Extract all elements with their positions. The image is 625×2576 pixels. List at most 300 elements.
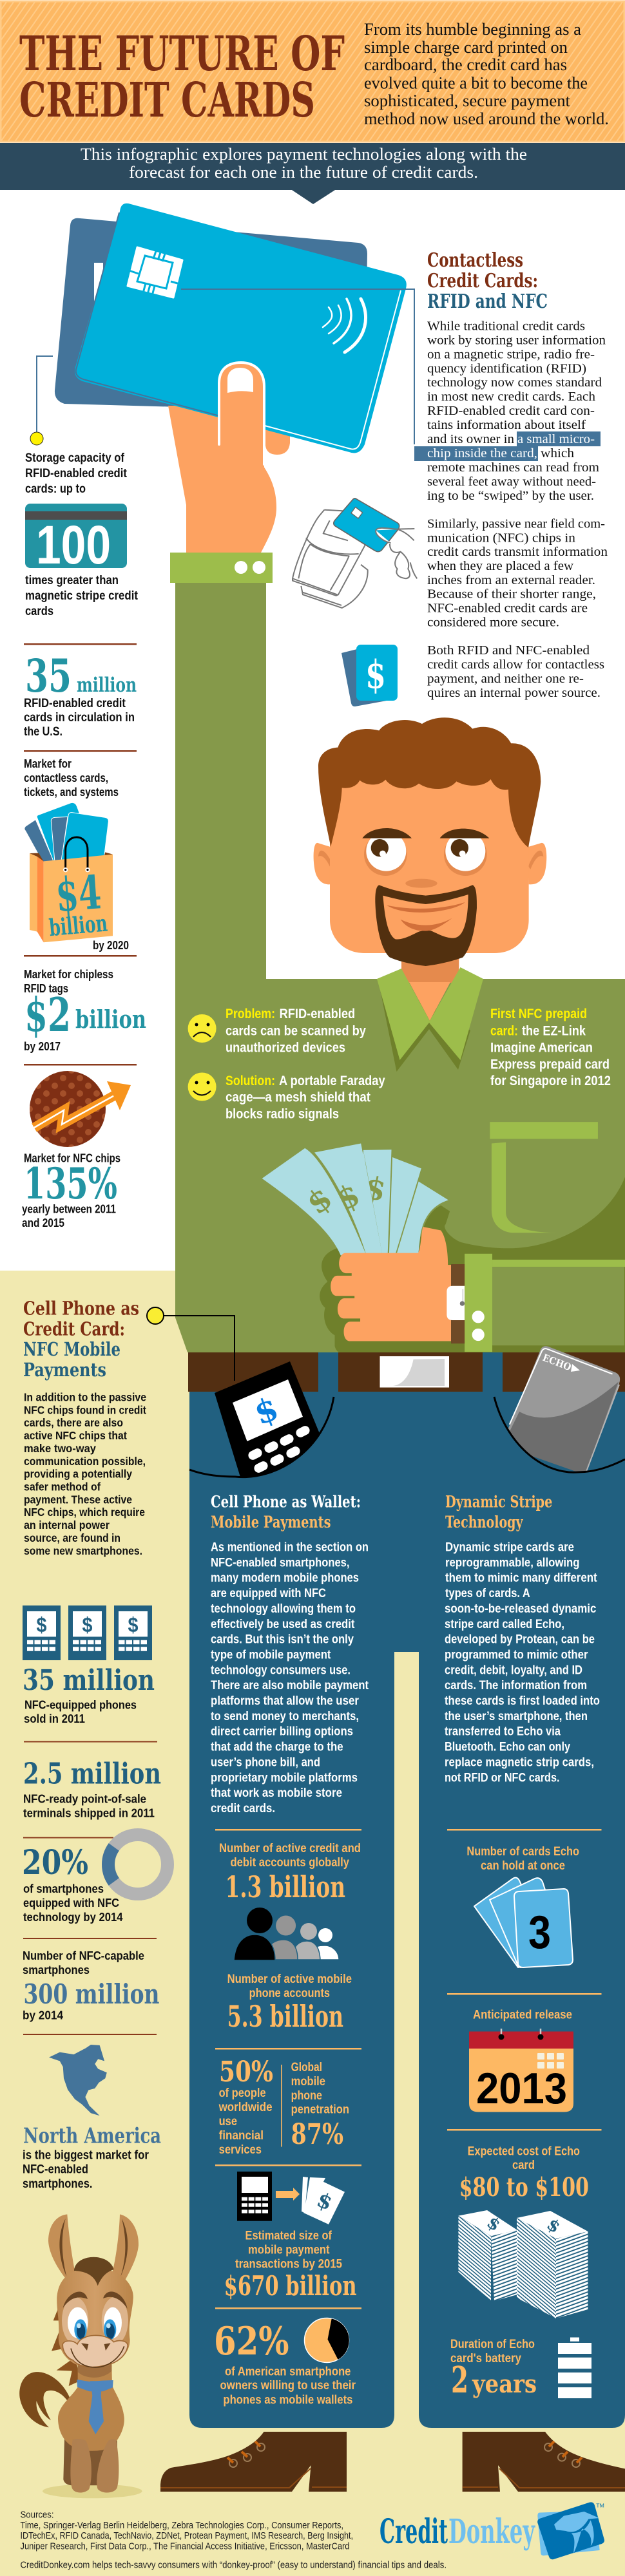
logo card icon <box>537 2502 604 2559</box>
ears <box>314 843 546 884</box>
icon: shopping bag of cards: $4 <box>54 865 103 922</box>
icon: phone to money <box>237 2172 345 2224</box>
body text: make two-way <box>24 1442 96 1455</box>
illustration: fist holding money <box>262 1143 625 1352</box>
body text: platforms that allow the user <box>211 1694 360 1708</box>
body text: credit cards. <box>211 1802 275 1815</box>
stat: 62% wallets: owners willing to use their <box>220 2379 356 2392</box>
body text: types of cards. A <box>445 1587 530 1600</box>
icon: dollar card: $ <box>365 652 386 697</box>
intro text <box>364 20 609 128</box>
body paragraphs: tains information about itself <box>427 418 586 432</box>
stat: mobile accounts: phone accounts <box>249 1987 330 2000</box>
stat: expected cost: card <box>512 2159 535 2172</box>
stat: transactions: $670 billion <box>224 2270 357 2302</box>
body text: technology allowing them to <box>211 1602 356 1616</box>
heading <box>23 1297 139 1381</box>
subtitle band with pointer <box>0 143 625 204</box>
panel: contactless text column <box>414 249 608 700</box>
body paragraphs <box>427 319 608 700</box>
stat: battery life <box>450 2338 591 2401</box>
stat: 50% financial services: use <box>219 2115 237 2128</box>
money bills: $ <box>361 1170 389 1209</box>
back card <box>55 218 367 412</box>
title: THE FUTURE OF <box>19 26 345 82</box>
callout: first NFC prepaid card: for Singapore in 2012 <box>490 1074 611 1088</box>
heading <box>211 1493 361 1531</box>
icon: calendar 2013: 2013 <box>476 2064 567 2113</box>
body text: There are also mobile payment <box>211 1679 369 1692</box>
stat: transactions <box>224 2230 357 2302</box>
mane <box>52 2309 81 2386</box>
eyebrows <box>63 2291 128 2309</box>
stat: 135%: 135% <box>24 1159 117 1209</box>
body paragraphs: chip inside the card, <box>427 446 537 460</box>
stat: 62% wallets: of American smartphone <box>225 2365 351 2378</box>
stat: storage capacity: Storage capacity of <box>25 451 125 465</box>
body text: effectively be used as credit <box>211 1618 355 1631</box>
body text: source, are found in <box>24 1531 120 1544</box>
pocket line <box>189 1397 334 1477</box>
pie chart <box>304 2318 349 2362</box>
stat: 2.5 million terminals: terminals shipped in 2011 <box>23 1806 155 1819</box>
title: CREDIT CARDS <box>19 73 315 128</box>
stat: 20% smartphones donut: technology by 2014 <box>23 1911 122 1924</box>
body text: replace magnetic strip cards, <box>445 1756 594 1769</box>
stat: storage capacity: times greater than <box>25 574 119 587</box>
illustration: donkey mascot <box>19 2214 142 2498</box>
stat: battery life: Duration of Echo <box>450 2338 535 2351</box>
stat: 50% financial services: 50% <box>219 2056 273 2088</box>
icon: mobile phone in pocket <box>189 1361 334 1488</box>
nose <box>405 879 438 888</box>
body text: NFC chips found in credit <box>24 1403 146 1416</box>
stat: North America: is the biggest market for <box>23 2149 149 2163</box>
body text: NFC chips, which require <box>24 1506 145 1519</box>
stat: storage capacity <box>25 451 139 618</box>
stat: $2 billion: billion <box>75 1005 146 1034</box>
stat: 20% smartphones donut: 20% <box>22 1843 88 1882</box>
callout: first NFC prepaid card <box>490 1007 611 1088</box>
body text: not RFID or NFC cards. <box>445 1771 559 1785</box>
donut chart <box>108 1835 168 1894</box>
body paragraphs: RFID-enabled credit card con- <box>427 404 595 418</box>
icon: North America map <box>49 2045 107 2116</box>
body paragraphs: several feet away without need- <box>427 475 596 489</box>
hair <box>318 717 541 848</box>
callout: problem and solution: A portable Faraday <box>279 1074 385 1088</box>
callout: problem and solution: cage—a mesh shield that <box>226 1090 370 1105</box>
body text: direct carrier billing options <box>211 1725 353 1739</box>
body <box>58 2363 124 2451</box>
sources footer: IDTechEx, RFID Canada, TechNavio, ZDNet, Protean Payment, IMS Research, Berg Insight, <box>21 2530 353 2541</box>
body text: cards. The information from <box>445 1679 587 1692</box>
icon: echo card in pocket <box>494 1346 625 1475</box>
stat: 135% <box>22 1071 131 1229</box>
sources footer: CreditDonkey.com helps tech-savvy consumers with “donkey-proof” (easy to understand) financial tips and deals. <box>21 2559 447 2571</box>
eyebrows <box>362 828 489 838</box>
stat: anticipated release: Anticipated release <box>473 2008 572 2022</box>
body paragraphs: which <box>541 446 574 460</box>
body text: them to mimic many different <box>445 1571 597 1585</box>
stat: $2 billion: $2 <box>24 987 71 1042</box>
stat: 135%: and 2015 <box>22 1217 64 1229</box>
stat: 87% penetration: penetration <box>291 2103 349 2117</box>
stat: 87% penetration <box>291 2061 349 2151</box>
body paragraphs: NFC-enabled credit cards are <box>427 601 588 615</box>
eyes <box>68 2307 122 2340</box>
stat: mobile accounts: 5.3 billion <box>227 1999 343 2034</box>
icon: three phones: $ <box>36 1613 47 1636</box>
body paragraphs: Because of their shorter range, <box>427 587 596 601</box>
highlight boxes <box>414 431 601 461</box>
body paragraphs: credit cards allow for contactless <box>427 658 604 672</box>
shirt cuff <box>465 1254 625 1352</box>
sleeve shadow <box>320 1177 625 1352</box>
body paragraphs: munication (NFC) chips in <box>427 531 575 545</box>
illustration: belt and buckle <box>188 1352 625 1392</box>
body paragraphs: ing to be “swiped” by the user. <box>427 489 594 503</box>
icon: shopping bag of cards: billion <box>48 910 108 942</box>
sources footer: Juniper Research, First Data Corp., The Financial Access Initiative, Ericsson, MasterCard <box>21 2541 349 2552</box>
body text: an internal power <box>24 1519 110 1531</box>
stat: $2 billion: by 2017 <box>24 1040 61 1053</box>
card chip <box>128 247 182 298</box>
body text: NFC-enabled smartphones, <box>211 1556 349 1569</box>
icon: happy face <box>188 1073 216 1101</box>
logo card icon: TM <box>596 2502 604 2508</box>
icon: phone to money: $ <box>314 2187 336 2215</box>
callout: problem and solution: blocks radio signals <box>226 1107 339 1122</box>
body paragraphs: quency identification (RFID) <box>427 361 586 375</box>
logo: CreditDonkey: Donkey <box>448 2512 535 2552</box>
head <box>330 768 529 953</box>
body text: cards. But this isn’t the only <box>211 1633 354 1647</box>
stat: anticipated release <box>469 2008 573 2113</box>
body text: providing a potentially <box>24 1468 132 1481</box>
stat: 50% financial services: worldwide <box>218 2101 273 2114</box>
icon: card with 100: 100 <box>36 515 111 575</box>
back legs <box>63 2439 119 2485</box>
icon: dollar card <box>341 645 398 706</box>
stat: mobile accounts <box>227 1973 352 2034</box>
callout: problem and solution: unauthorized devices <box>226 1041 345 1055</box>
leader line: storage stat <box>30 356 53 445</box>
illustration: left shoe <box>160 2432 347 2492</box>
stat: 87% penetration: 87% <box>291 2118 343 2151</box>
stat: cards echo holds: 3 <box>528 1907 551 1958</box>
subtitle band with pointer: This infographic explores payment technologies along with the <box>81 145 527 164</box>
stat: transactions: transactions by 2015 <box>235 2257 342 2271</box>
stat: $4 billion market: contactless cards, <box>24 772 108 784</box>
body text: transferred to Echo via <box>445 1725 561 1739</box>
stat: 50% financial services: of people <box>219 2087 266 2100</box>
body text: In addition to the passive <box>24 1390 146 1403</box>
stat: cards echo holds: can hold at once <box>481 1859 565 1873</box>
heading: NFC Mobile <box>23 1338 120 1360</box>
body text: that add the charge to the <box>211 1741 343 1754</box>
body paragraphs: work by storing user information <box>427 333 606 347</box>
body paragraphs: technology now comes standard <box>427 375 602 390</box>
body paragraphs: and its owner in <box>427 432 514 446</box>
stat: storage capacity: cards: up to <box>25 482 86 496</box>
stat: 2.5 million terminals: NFC-ready point-of-sale <box>23 1793 146 1806</box>
leader line: chip to highlight <box>181 289 414 444</box>
body text: Bluetooth. Echo can only <box>445 1741 570 1754</box>
stat: 35 million phones: NFC-equipped phones <box>24 1699 137 1712</box>
illustration: man's face <box>314 717 546 983</box>
stat: 35 million: RFID-enabled credit <box>24 697 126 710</box>
body paragraphs: on a magnetic stripe, radio fre- <box>427 347 595 361</box>
heading <box>445 1493 552 1531</box>
stat: 135%: Market for NFC chips <box>24 1151 120 1164</box>
stat: mobile accounts: Number of active mobile <box>227 1973 352 1986</box>
body text: communication possible, <box>24 1455 146 1468</box>
icon: mobile phone in pocket: $ <box>249 1389 284 1432</box>
body paragraphs: considered more secure. <box>427 615 559 629</box>
header banner <box>1 1 624 142</box>
intro text: cardboard, the credit card has <box>364 55 567 74</box>
body text: user’s phone bill, and <box>211 1756 320 1769</box>
stat: 135%: yearly between 2011 <box>22 1203 116 1216</box>
body text: developed by Protean, can be <box>445 1633 595 1647</box>
stat: 300 million: Number of NFC-capable <box>23 1949 144 1962</box>
body text: safer method of <box>24 1480 101 1493</box>
stat: 50% financial services: financial <box>219 2129 264 2143</box>
icon: stacks of money: $ <box>483 2213 504 2235</box>
body text: As mentioned in the section on <box>211 1540 369 1555</box>
body text: the user’s smartphone, then <box>445 1710 588 1723</box>
body paragraphs: inches from an external reader. <box>427 573 595 587</box>
stat: North America <box>23 2123 161 2191</box>
body text: active NFC chips that <box>24 1429 127 1442</box>
eyes <box>364 831 487 876</box>
stat: 20% smartphones donut: of smartphones <box>23 1882 104 1895</box>
stat: active accounts: Number of active credit and <box>219 1842 361 1855</box>
stat: storage capacity: cards <box>25 605 53 618</box>
stat: North America: smartphones. <box>23 2177 93 2191</box>
body text: technology consumers use. <box>211 1663 351 1677</box>
body paragraphs: credit cards transmit information <box>427 545 608 559</box>
icon: three phones: $ <box>82 1613 93 1636</box>
body text: type of mobile payment <box>211 1649 331 1662</box>
money bills: $ <box>331 1177 365 1218</box>
icon: sad face <box>188 1014 216 1043</box>
head <box>57 2269 133 2365</box>
stat: transactions: mobile payment <box>248 2244 330 2257</box>
stat: transactions: Estimated size of <box>245 2230 332 2243</box>
stat: 62% wallets: 62% <box>214 2319 289 2364</box>
muzzle <box>63 2335 128 2367</box>
stat: active accounts: 1.3 billion <box>226 1870 345 1904</box>
stat: 35 million phones: 35 million <box>23 1664 155 1697</box>
icon: card reader terminal <box>293 498 417 608</box>
heading: Payments <box>23 1359 106 1381</box>
body paragraphs: Similarly, passive near field com- <box>427 517 605 531</box>
body paragraphs: a small micro- <box>517 432 595 446</box>
heading: Credit Cards: <box>427 270 538 292</box>
money bills <box>262 1143 448 1255</box>
body text: reprogrammable, allowing <box>445 1556 580 1569</box>
stat: 35 million phones <box>23 1664 155 1725</box>
body paragraphs: Both RFID and NFC-enabled <box>427 643 590 658</box>
body text: stripe card called Echo, <box>445 1618 564 1631</box>
background: cream lower section <box>0 1271 625 2576</box>
panel: cell phone as wallet column <box>211 1493 369 2407</box>
contactless waves <box>323 299 366 352</box>
connector to phone <box>147 1307 235 1381</box>
stat: expected cost: Expected cost of Echo <box>468 2145 580 2158</box>
body text <box>24 1390 146 1557</box>
stat: 2.5 million terminals <box>23 1757 161 1819</box>
sources footer <box>21 2509 447 2571</box>
body paragraphs: payment, and neither one re- <box>427 672 584 686</box>
stat: storage capacity: magnetic stripe credit <box>25 589 139 603</box>
stat: $2 billion <box>24 968 146 1053</box>
panel: cell phone as credit card <box>22 1297 235 2191</box>
panel: dynamic stripe technology column <box>445 1493 602 2401</box>
neck shade <box>78 2363 111 2378</box>
body paragraphs: While traditional credit cards <box>427 319 585 334</box>
callout: problem and solution <box>188 1007 385 1122</box>
callout: problem and solution: Problem: <box>226 1007 275 1021</box>
stat: $2 billion: RFID tags <box>24 982 68 995</box>
body text: cards, there are also <box>24 1416 123 1429</box>
callout: first NFC prepaid card: Express prepaid card <box>490 1057 610 1072</box>
icon: three phones: $ <box>128 1613 139 1636</box>
stat: 62% wallets: phones as mobile wallets <box>223 2394 352 2407</box>
body paragraphs: remote machines can read from <box>427 460 599 475</box>
front card <box>75 204 407 453</box>
body text: are equipped with NFC <box>211 1587 326 1600</box>
body text: these cards is first loaded into <box>445 1694 600 1708</box>
intro text: evolved quite a bit to become the <box>364 73 588 93</box>
stat: active accounts <box>219 1842 361 1960</box>
illustration: hand holding credit cards <box>55 204 407 583</box>
callout: first NFC prepaid card: the EZ-Link <box>522 1024 586 1039</box>
body paragraphs: when they are placed a few <box>427 559 574 573</box>
stat: 50% financial services <box>218 2056 273 2157</box>
body text: soon-to-be-released dynamic <box>445 1602 597 1616</box>
stat: 300 million: 300 million <box>23 1978 160 2010</box>
sources footer: Time, Springer-Verlag Berlin Heidelberg, Zebra Technologies Corp., Consumer Reports, <box>21 2520 343 2531</box>
body text: payment. These active <box>24 1493 132 1506</box>
stat: 2.5 million terminals: 2.5 million <box>23 1757 161 1791</box>
stat: 35 million: million <box>77 674 137 697</box>
stat: 35 million: 35 <box>25 649 72 703</box>
icon: growth arrow on ball <box>30 1071 131 1147</box>
body text: Dynamic stripe cards are <box>445 1540 574 1555</box>
body text <box>445 1540 600 1785</box>
tie <box>77 2380 113 2434</box>
body paragraphs: in most new credit cards. Each <box>427 390 595 404</box>
thumb <box>219 363 264 470</box>
callout: problem and solution: cards can be scanned by <box>226 1024 366 1039</box>
watch <box>447 1264 465 1343</box>
stat: 87% penetration: phone <box>291 2089 322 2103</box>
icon: calendar 2013 <box>469 2029 573 2113</box>
stat: cards echo holds: Number of cards Echo <box>466 1845 579 1859</box>
callout: problem and solution: Solution: <box>226 1074 275 1088</box>
icon: stacks of money <box>458 2210 588 2318</box>
stat: 35 million: cards in circulation in <box>24 711 135 724</box>
icon: three phones <box>23 1605 152 1660</box>
stat: cards echo holds <box>466 1845 579 1967</box>
body text: some new smartphones. <box>24 1544 142 1557</box>
body text: programmed to mimic other <box>445 1649 588 1662</box>
pocket line <box>494 1397 625 1472</box>
stat: $4 billion market: Market for <box>24 757 72 770</box>
body text <box>211 1540 369 1815</box>
logo: CreditDonkey: Credit <box>380 2512 448 2552</box>
stat: 20% smartphones donut: equipped with NFC <box>23 1897 119 1909</box>
stat: 300 million: by 2014 <box>23 2009 63 2022</box>
heading: Dynamic Stripe <box>445 1493 552 1511</box>
stat: 300 million <box>23 1949 160 2022</box>
stat: 300 million: smartphones <box>23 1964 90 1976</box>
stat: 35 million <box>24 649 137 739</box>
heading: Credit Card: <box>23 1318 125 1340</box>
sleeve cuff <box>170 553 273 583</box>
heading: Technology <box>445 1513 524 1531</box>
body text: many modern mobile phones <box>211 1571 359 1585</box>
sources footer: Sources: <box>21 2509 54 2520</box>
icon: echo card in pocket: ECHO <box>541 1352 573 1373</box>
icon: stacks of money: $ <box>543 2215 564 2237</box>
stat: active accounts: debit accounts globally <box>231 1856 349 1870</box>
illustration: jacket pocket <box>490 1122 598 1233</box>
logo: CreditDonkey <box>380 2502 604 2559</box>
icon: three cards <box>474 1878 573 1967</box>
intro text: sophisticated, secure payment <box>364 91 571 110</box>
stat: North America: North America <box>23 2123 161 2148</box>
heading: Cell Phone as Wallet: <box>211 1493 361 1511</box>
stat: expected cost <box>458 2145 589 2318</box>
intro text: method now used around the world. <box>364 109 609 128</box>
heading: Cell Phone as <box>23 1297 139 1319</box>
icon: shopping bag of cards <box>24 802 113 942</box>
subtitle band with pointer: forecast for each one in the future of credit cards. <box>129 163 478 182</box>
stat: $2 billion: Market for chipless <box>24 968 113 981</box>
heading: Mobile Payments <box>211 1513 331 1531</box>
money bills: $ <box>300 1180 339 1222</box>
stat: 62% wallets <box>214 2318 356 2407</box>
heading <box>427 249 548 313</box>
intro text: From its humble beginning as a <box>364 20 581 39</box>
jacket body <box>175 582 625 1352</box>
panel: blue trousers background <box>189 1352 625 2428</box>
tail <box>19 2372 70 2427</box>
stat: 87% penetration: Global <box>291 2061 322 2074</box>
forelock <box>74 2257 114 2286</box>
stat: $4 billion market: by 2020 <box>93 939 129 952</box>
stat: North America: NFC-enabled <box>23 2163 88 2177</box>
body text: to send money to merchants, <box>211 1710 359 1723</box>
heading: RFID and NFC <box>427 290 548 313</box>
body text: proprietary mobile platforms <box>211 1771 358 1785</box>
stat: 87% penetration: mobile <box>291 2075 325 2088</box>
illustration: shirt collar <box>377 967 483 1072</box>
intro text: simple charge card printed on <box>364 38 568 57</box>
body text: credit, debit, loyalty, and ID <box>445 1663 582 1677</box>
icon: people <box>234 1908 339 1960</box>
stat: $4 billion market: tickets, and systems <box>24 786 119 799</box>
mouth <box>387 902 465 931</box>
ears <box>48 2214 139 2285</box>
eye sockets <box>62 2297 128 2344</box>
front legs <box>70 2439 119 2493</box>
stat: 20% smartphones donut <box>22 1835 168 1924</box>
